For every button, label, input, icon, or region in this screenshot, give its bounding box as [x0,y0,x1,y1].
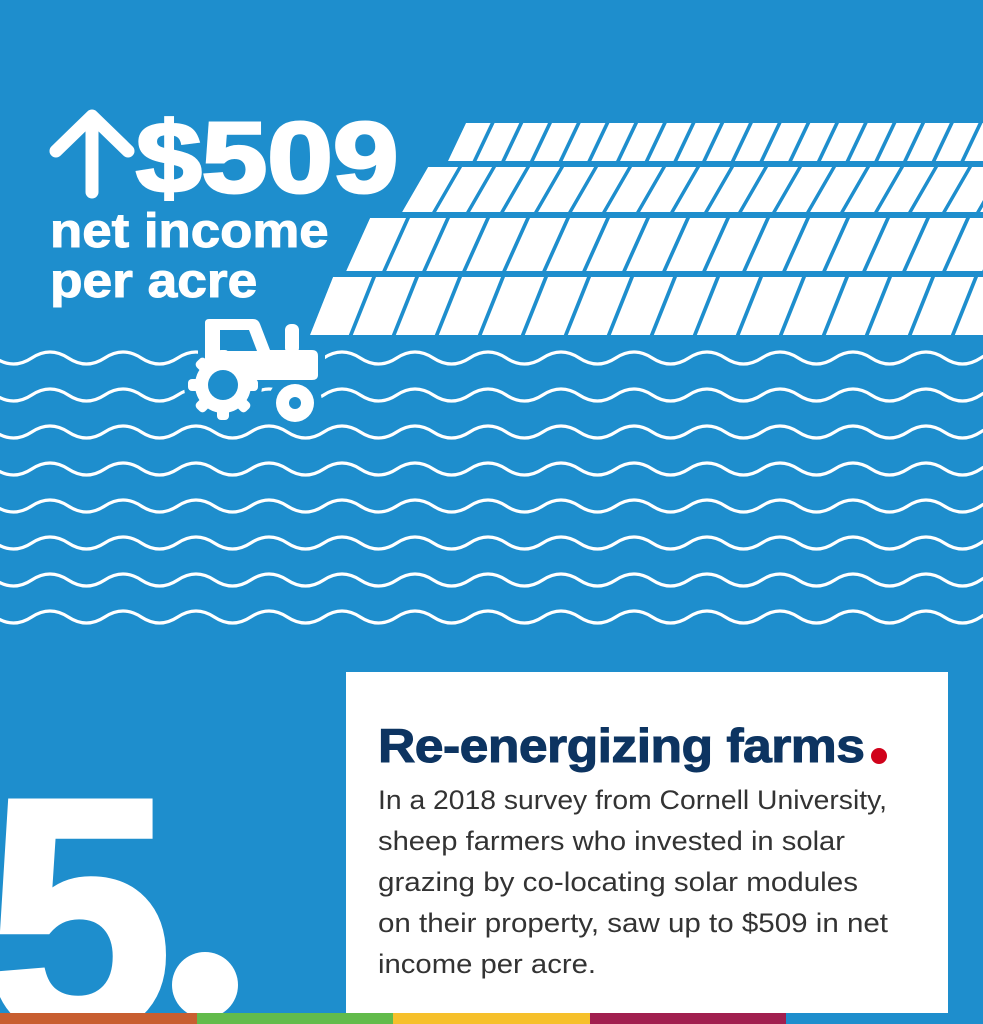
headline subtitle: net income [50,203,329,257]
body text: grazing by co-locating solar modules [378,867,858,897]
body text: In a 2018 survey from Cornell University, [378,785,887,815]
color bar [0,1013,786,1024]
panel: text card [346,672,948,1013]
headline subtitle: per acre [50,253,257,307]
body text: on their property, saw up to $509 in net [378,908,889,938]
big number 5 [0,798,238,1013]
headline subtitle [50,203,329,307]
solar panel array [310,123,983,335]
heading: Re-energizing farms [378,720,864,772]
wavy field rows [0,352,983,623]
body text: income per acre. [378,949,596,979]
body text: sheep farmers who invested in solar [378,826,845,856]
body text [378,785,889,979]
icon: up arrow [56,116,128,192]
icon: tractor [188,319,318,423]
headline figure: $509 [136,102,398,214]
red dot [871,748,887,764]
